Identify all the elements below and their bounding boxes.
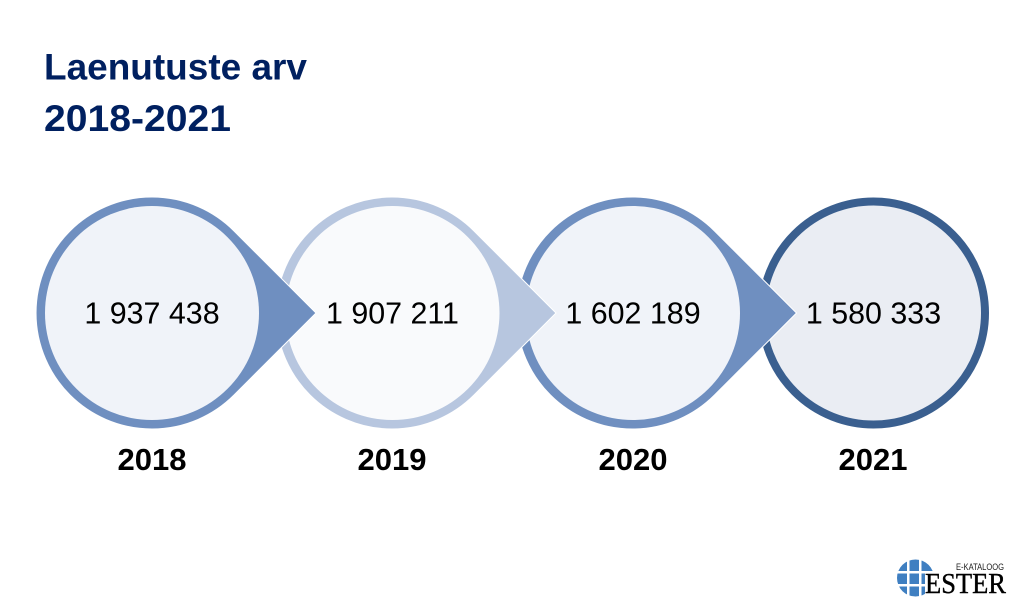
logo subtitle: E-KATALOOG (956, 562, 1004, 573)
year label: 2021: 2021 (839, 442, 907, 477)
logo wordmark: ESTER (925, 568, 1007, 600)
circle with arrow: 2020 (516, 197, 796, 429)
circle with arrow: 2019 (276, 197, 556, 429)
year label: 2020: 2020 (599, 442, 667, 477)
circle with arrow: 2018 (36, 197, 316, 429)
title (44, 46, 307, 139)
year label: 2018: 2018 (118, 442, 186, 477)
circle: 2021 (762, 202, 985, 424)
title: Laenutuste arv (44, 46, 307, 88)
circle with arrow: 2019: 1 907 211 (326, 296, 459, 330)
title: 2018-2021 (44, 98, 231, 139)
logo: ESTER e-kataloog (895, 558, 1007, 600)
icon: globe (895, 558, 939, 598)
circle with arrow: 2018: 1 937 438 (84, 296, 220, 330)
circle with arrow: 2020: 1 602 189 (565, 296, 701, 330)
circle: 2021: 1 580 333 (806, 296, 941, 330)
year label: 2019: 2019 (358, 442, 426, 477)
